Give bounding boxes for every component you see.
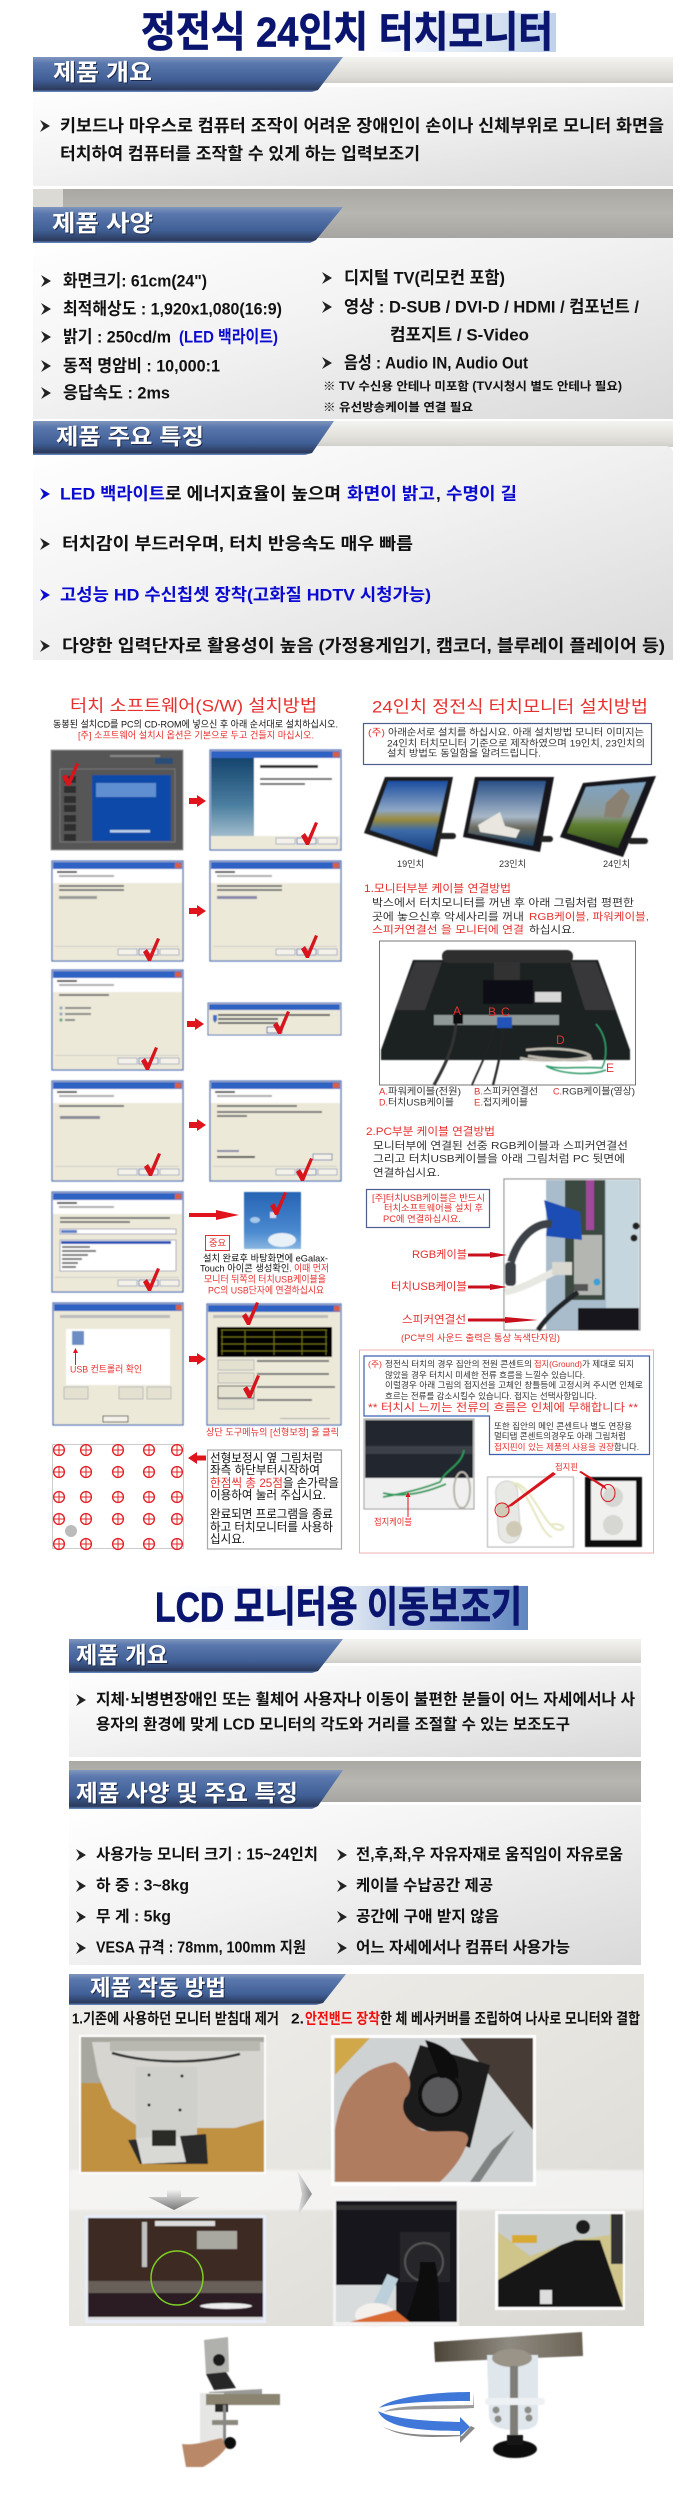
arrow: down — [148, 2190, 200, 2210]
legend: cable labels: RGB케이블(영상) — [562, 1086, 635, 1098]
label: 19 inch: 19인치 — [397, 858, 424, 869]
text block: grounding explanation: (주) — [368, 1359, 382, 1369]
note box: USB connect after install: [주]터치USB케이블은 반드시 — [372, 1192, 485, 1203]
photo: wall socket — [585, 1477, 642, 1547]
text block: monitor cable instructions: 곳에 놓으신후 악세사리를 꺼내 — [372, 911, 524, 923]
text block: important note: 이때 먼저 — [294, 1264, 329, 1274]
text block: multi-tap advice: 멀티탭 콘센트의경우도 아래 그림처럼 — [494, 1431, 626, 1441]
note box: USB connect after install — [366, 1190, 490, 1228]
text block: important note: 설치 완료후 바탕화면에 eGalax- — [203, 1252, 328, 1264]
text block: multi-tap advice: 접지핀이 있는 제품의 사용을 권장 — [494, 1442, 614, 1452]
title: capacitive 24 inch touch monitor: 정전식 24인치 터치모니터 — [141, 8, 553, 56]
list: right specs: 디지털 TV(리모컨 포함) — [344, 268, 505, 288]
list: right specs — [322, 268, 639, 414]
text block: important note: PC의 USB단자에 연결하십시요 — [208, 1284, 324, 1296]
icon: check mark — [273, 1011, 290, 1034]
text block: monitor cable instructions: 박스에서 터치모니터를 꺼낸 후 아래 그림처럼 평편한 — [372, 896, 634, 909]
heading: specs and features — [69, 1770, 343, 1809]
caption: click calibration menu: 상단 도구메뉴의 [선형보정] 을 클릭 — [206, 1426, 339, 1438]
panel: arm overview — [69, 1639, 641, 1757]
note box: USB connect after install: 터치소프트웨어를 설치 후 — [384, 1202, 483, 1213]
screenshot: setup type step — [52, 861, 183, 961]
arrow — [187, 1018, 204, 1030]
feature: LED backlight: 화면이 밝고 — [347, 484, 435, 504]
screenshot: setup type checked — [210, 861, 341, 961]
photo: PC rear ports — [504, 1179, 640, 1330]
calibration grid: 25 touch points — [52, 1444, 184, 1549]
marker: green ellipse — [151, 2251, 203, 2305]
screenshot: program folder — [52, 1192, 183, 1292]
legend: cable labels: 파워케이블(전원) — [388, 1086, 461, 1098]
feature: LED backlight: LED 백라이트 — [60, 484, 165, 504]
list: left specs: 밝기 : 250cd/m — [63, 328, 171, 346]
label and arrow: speaker cable — [402, 1313, 538, 1326]
photo: 19 inch monitor — [364, 777, 456, 857]
text block: grounding explanation: 흐르는 전류를 감소시킬수 있습니다. 접지는 선택사항입니다. — [385, 1391, 597, 1401]
list: arm features: 어느 자세에서나 컴퓨터 사용가능 — [356, 1938, 570, 1956]
text block: monitor cable instructions: 하십시요. — [529, 923, 575, 936]
screenshot: multi monitor option — [52, 1081, 183, 1181]
text block: multi-tap advice — [494, 1421, 639, 1452]
list: arm features: 공간에 구애 받지 않음 — [356, 1908, 499, 1926]
label and arrow: ground cable — [374, 1492, 412, 1527]
text block: monitor cable instructions: 스피커연결선 을 모니터에 연결 — [372, 924, 524, 936]
feature: LED backlight: 수명이 길 — [446, 484, 517, 504]
label and arrow: ground cable: 접지케이블 — [374, 1516, 412, 1527]
badge: important — [206, 1236, 230, 1250]
screenshot: calibration option — [52, 970, 183, 1070]
photo: monitor rear with cables: C — [501, 1005, 510, 1019]
icon: check mark — [143, 1268, 160, 1291]
heading: product overview: 제품 개요 — [53, 59, 152, 85]
icon: check mark on launcher — [62, 763, 79, 786]
photo: monitor rear with cables — [380, 941, 636, 1085]
panel: software installation — [51, 696, 342, 1549]
photo: 24 inch monitor — [560, 776, 656, 857]
list: arm features: 전,후,좌,우 자유자재로 움직임이 자유로움 — [356, 1846, 623, 1864]
text box: calibration instructions — [208, 1450, 342, 1549]
text block: monitor cable instructions: RGB케이블, 파워케이블, — [529, 910, 649, 923]
feature: input terminals: 다양한 입력단자로 활용성이 높음 (가정용게임기, 캠코더, 블루레이 플레이어 등) — [62, 636, 665, 656]
label: ground pin: 접지핀 — [555, 1462, 578, 1472]
panel: monitor installation — [360, 698, 656, 1553]
text block: grounding explanation: 접지(Ground) — [534, 1359, 582, 1369]
legend: cable labels: D. — [379, 1098, 388, 1108]
text box: calibration instructions: 을 손가락을 — [283, 1476, 339, 1490]
text box: calibration instructions: 완료되면 프로그램을 종료 — [210, 1507, 333, 1521]
feature: LED backlight — [40, 484, 517, 504]
list: arm specs: 무 게 : 5kg — [96, 1908, 171, 1926]
feature: LED backlight: 로 에너지효율이 높으며 — [165, 484, 341, 504]
list: arm specs: 사용가능 모니터 크기 : 15~24인치 — [96, 1846, 318, 1864]
label: USB controller check: USB 컨트롤러 확인 — [70, 1364, 142, 1376]
text block: important note — [200, 1252, 329, 1296]
text box: calibration instructions: 십시요. — [210, 1532, 245, 1546]
heading: PC cable connection: 2.PC부분 케이블 연결방법 — [366, 1125, 495, 1138]
list: right specs: ※ TV 수신용 안테나 미포함 (TV시청시 별도 안테나 필요) — [323, 379, 622, 393]
screenshot: USB controller dialog — [53, 1303, 183, 1425]
icon: check mark — [144, 1153, 161, 1176]
text block: grounding explanation: 않았을 경우 터치시 미세한 전류 흐름을 느낄수 있습니다. — [385, 1370, 585, 1380]
text block: arm description: 지체·뇌병변장애인 또는 휠체어 사용자나 이동이 불편한 분들이 어느 자세에서나 사 — [96, 1690, 635, 1708]
heading: how to operate — [69, 1974, 346, 2005]
text block: PC cable instructions: 그리고 터치USB케이블을 아래 그림처럼 PC 뒷면에 — [373, 1152, 625, 1165]
list: arm features: 케이블 수납공간 제공 — [356, 1876, 493, 1894]
text block: PC cable instructions — [373, 1140, 628, 1179]
heading: arm overview: 제품 개요 — [76, 1642, 168, 1668]
icon: check mark — [270, 1192, 287, 1215]
text block: grounding explanation: 정전식 터치의 경우 집안의 전원 콘센트의 — [385, 1359, 532, 1369]
photo: 23 inch monitor — [463, 777, 554, 852]
list: right specs: 영상 : D-SUB / DVI-D / HDMI / 컴포넌트 / — [344, 298, 639, 316]
label and arrow: speaker cable: 스피커연결선 — [402, 1313, 466, 1326]
photo: monitor back holes — [85, 2215, 266, 2323]
list: right specs: ※ 유선방송케이블 연결 필요 — [323, 400, 473, 414]
text block: PC cable instructions: 모니터부에 연결된 선중 RGB케이블과 스피커연결선 — [373, 1140, 628, 1152]
photo: monitor rear with cables: D — [556, 1033, 565, 1047]
text: step 2: 안전밴드 장착 — [305, 2010, 380, 2028]
note box: sizes: 24인치 터치모니터 기준으로 제작하였으며 19인치, 23인치의 — [387, 738, 645, 750]
icon: check mark — [141, 1047, 158, 1070]
list: left specs — [41, 272, 282, 402]
legend: cable labels: 접지케이블 — [483, 1096, 528, 1108]
arrow: right — [297, 2170, 312, 2217]
list: left specs: 화면크기: 61cm(24") — [63, 272, 207, 290]
list: arm features — [337, 1846, 623, 1956]
note box: sizes: (주) — [368, 728, 385, 738]
list: arm specs: 하 중 : 3~8kg — [96, 1876, 189, 1894]
text box: calibration instructions: 하고 터치모니터를 사용하 — [210, 1520, 333, 1534]
text block: PC cable instructions: 연결하십시요. — [373, 1166, 440, 1179]
panel: product specifications — [33, 189, 673, 419]
title: LCD monitor arm: LCD 모니터용 이동보조기 — [155, 1584, 522, 1630]
photo: arm attached — [495, 2211, 625, 2310]
list: right specs: 음성 : Audio IN, Audio Out — [344, 354, 528, 372]
legend: cable labels: C. — [553, 1086, 562, 1098]
label and arrow: RGB cable — [412, 1248, 507, 1261]
legend: cable labels: A. — [379, 1086, 388, 1098]
arrow — [189, 795, 206, 807]
note box: USB connect after install: PC에 연결하십시요. — [383, 1214, 461, 1224]
screenshot: desktop icon — [244, 1192, 301, 1249]
text block: overview description: 터치하여 컴퓨터를 조작할 수 있게 하는 입력보조기 — [60, 144, 420, 164]
arrow: up to USB icon — [73, 1348, 78, 1365]
photo: screwdriver on mount — [333, 2198, 459, 2327]
text block: grounding explanation: 가 제대로 되지 — [582, 1359, 634, 1369]
heading: main features — [33, 421, 334, 455]
photo: monitor rear with cables: E — [606, 1061, 614, 1075]
icon: check mark — [301, 822, 318, 845]
text block: monitor cable instructions — [372, 896, 649, 936]
text block: installation intro: 동봉된 설치CD를 PC의 CD-ROM에 넣으신 후 아래 순서대로 설치하십시오. — [53, 718, 338, 730]
arrow: left pointing — [188, 1452, 206, 1464]
arrow — [189, 1119, 206, 1131]
photo: monitor rear with cables: B — [488, 1005, 496, 1019]
text box: calibration instructions: 좌측 하단부터시작하여 — [210, 1463, 320, 1477]
text block: grounding explanation: 이럴경우 아래 그림의 접지선을 고체인 창틀등에 고정시켜 주시면 인체로 — [385, 1380, 643, 1390]
panel: main features — [33, 421, 673, 660]
caption: green sound output: (PC부의 사운드 출력은 통상 녹색단자임) — [401, 1332, 560, 1343]
photo: monitor rear with cables: A — [453, 1004, 461, 1018]
list: left specs: 응답속도 : 2ms — [63, 384, 170, 402]
feature: touch response: 터치감이 부드러우며, 터치 반응속도 매우 빠름 — [62, 534, 413, 554]
heading: software installation: 터치 소프트웨어(S/W) 설치방법 — [70, 696, 317, 716]
icon: check mark — [296, 1158, 313, 1181]
panel: grounding note — [360, 1350, 654, 1553]
note box: sizes — [364, 724, 652, 764]
heading: product specifications — [33, 207, 343, 243]
arrow — [189, 1353, 206, 1365]
text block: important note: 모니터 뒤쪽의 터치USB케이블을 — [204, 1274, 326, 1286]
badge: important: 중요 — [209, 1238, 226, 1248]
icon: check mark on button — [243, 1375, 260, 1398]
list: left specs: (LED 백라이트) — [179, 328, 278, 346]
text box: calibration instructions: 선형보정시 옆 그림처럼 — [210, 1451, 323, 1465]
label: 23 inch: 23인치 — [499, 858, 526, 869]
screenshot: install message — [208, 1003, 341, 1035]
photo: hand attaching plate — [331, 2035, 536, 2186]
feature: HD tuner: 고성능 HD 수신칩셋 장착(고화질 HDTV 시청가능) — [60, 586, 431, 604]
text box: calibration instructions: 이용하여 눌러 주십시요. — [210, 1488, 326, 1502]
text: step 2 — [291, 2010, 640, 2028]
note box: sizes: 아래순서로 설치를 하십시요. 아래 설치방법 모니터 이미지는 — [388, 726, 644, 738]
panel: how to operate — [69, 1974, 644, 2327]
text block: overview description: 키보드나 마우스로 컴퓨터 조작이 어려운 장애인이 손이나 신체부위로 모니터 화면을 — [60, 116, 664, 136]
text block: installation intro: [주] 소프트웨어 설치시 옵션은 기본으로 두고 건들지 마십시오. — [78, 730, 314, 742]
heading: monitor installation: 24인치 정전식 터치모니터 설치방법 — [372, 698, 648, 716]
callout: harmless current: ** 터치시 느끼는 전류의 흐름은 인체에 무해합니다 ** — [368, 1400, 639, 1414]
legend: cable labels: B. — [474, 1086, 483, 1098]
legend: cable labels: E. — [474, 1098, 483, 1108]
legend: cable labels: 터치USB케이블 — [388, 1096, 454, 1108]
text: step 2: 2. — [291, 2010, 304, 2028]
marker: ground pin indicators — [495, 1471, 615, 1517]
label: 24 inch: 24인치 — [603, 858, 630, 869]
label and arrow: touch USB cable: 터치USB케이블 — [391, 1280, 467, 1293]
panel: arm specs and features — [69, 1761, 641, 1965]
icon: check mark on tab — [242, 1302, 259, 1325]
text block: installation intro — [53, 718, 338, 742]
text: step 1: 1.기존에 사용하던 모니터 받침대 제거 — [72, 2010, 279, 2028]
list: arm specs — [76, 1846, 318, 1956]
heading: arm overview — [69, 1639, 343, 1673]
arrow: long red arrow — [189, 1210, 239, 1220]
note box: sizes: 설치 방법도 동일함을 알려드립니다. — [387, 748, 541, 760]
photo: monitor stand rear — [79, 2035, 266, 2174]
heading: product overview — [33, 57, 343, 92]
heading: main features: 제품 주요 특징 — [56, 424, 204, 450]
label and arrow: RGB cable: RGB케이블 — [412, 1248, 467, 1261]
heading: product specifications: 제품 사양 — [52, 210, 153, 236]
text block: multi-tap advice: 합니다. — [614, 1442, 639, 1452]
screenshot: calibration tool tab — [207, 1304, 341, 1425]
label and arrow: touch USB cable — [391, 1280, 507, 1293]
legend: cable labels: 스피커연결선 — [483, 1086, 538, 1098]
photo: power strip — [488, 1477, 574, 1547]
text block: important note: Touch 아이콘 생성확인. — [200, 1262, 292, 1274]
text block: arm description — [76, 1690, 635, 1734]
heading: monitor cable connection: 1.모니터부분 케이블 연결방법 — [364, 882, 511, 895]
text box: calibration instructions: 한점씩 총 25점 — [210, 1476, 283, 1490]
legend: cable labels — [379, 1086, 635, 1108]
text block: multi-tap advice: 또한 집안의 메인 콘센트나 별도 연장용 — [494, 1421, 632, 1431]
photo: ground wire on monitor — [364, 1419, 474, 1509]
arrow — [189, 905, 206, 917]
photo: clamp with hand — [182, 2337, 280, 2467]
icon: check mark — [143, 938, 160, 961]
screenshot: destination folder — [210, 1081, 341, 1181]
icon: check mark — [301, 935, 318, 958]
heading: specs and features: 제품 사양 및 주요 특징 — [76, 1780, 298, 1806]
list: arm specs: VESA 규격 : 78mm, 100mm 지원 — [96, 1938, 306, 1956]
heading: how to operate: 제품 작동 방법 — [90, 1976, 226, 2000]
photo: clamp with knob — [434, 2332, 583, 2458]
feature: LED backlight: , — [436, 484, 441, 504]
text block: grounding explanation — [368, 1359, 643, 1401]
list: right specs: 컴포지트 / S-Video — [390, 326, 529, 344]
screenshot: welcome wizard — [210, 750, 341, 850]
panel: product overview — [33, 57, 673, 186]
screenshot: installer launcher — [51, 750, 183, 850]
list: left specs: 최적해상도 : 1,920x1,080(16:9) — [63, 300, 282, 318]
text block: overview description — [40, 116, 664, 164]
list: left specs: 동적 명암비 : 10,000:1 — [63, 356, 220, 376]
text block: arm description: 용자의 환경에 맞게 LCD 모니터의 각도와 거리를 조절할 수 있는 보조도구 — [96, 1716, 570, 1734]
arrow: rotation direction — [378, 2392, 475, 2443]
text: step 2: 한 체 베사커버를 조립하여 나사로 모니터와 결합 — [380, 2010, 640, 2028]
